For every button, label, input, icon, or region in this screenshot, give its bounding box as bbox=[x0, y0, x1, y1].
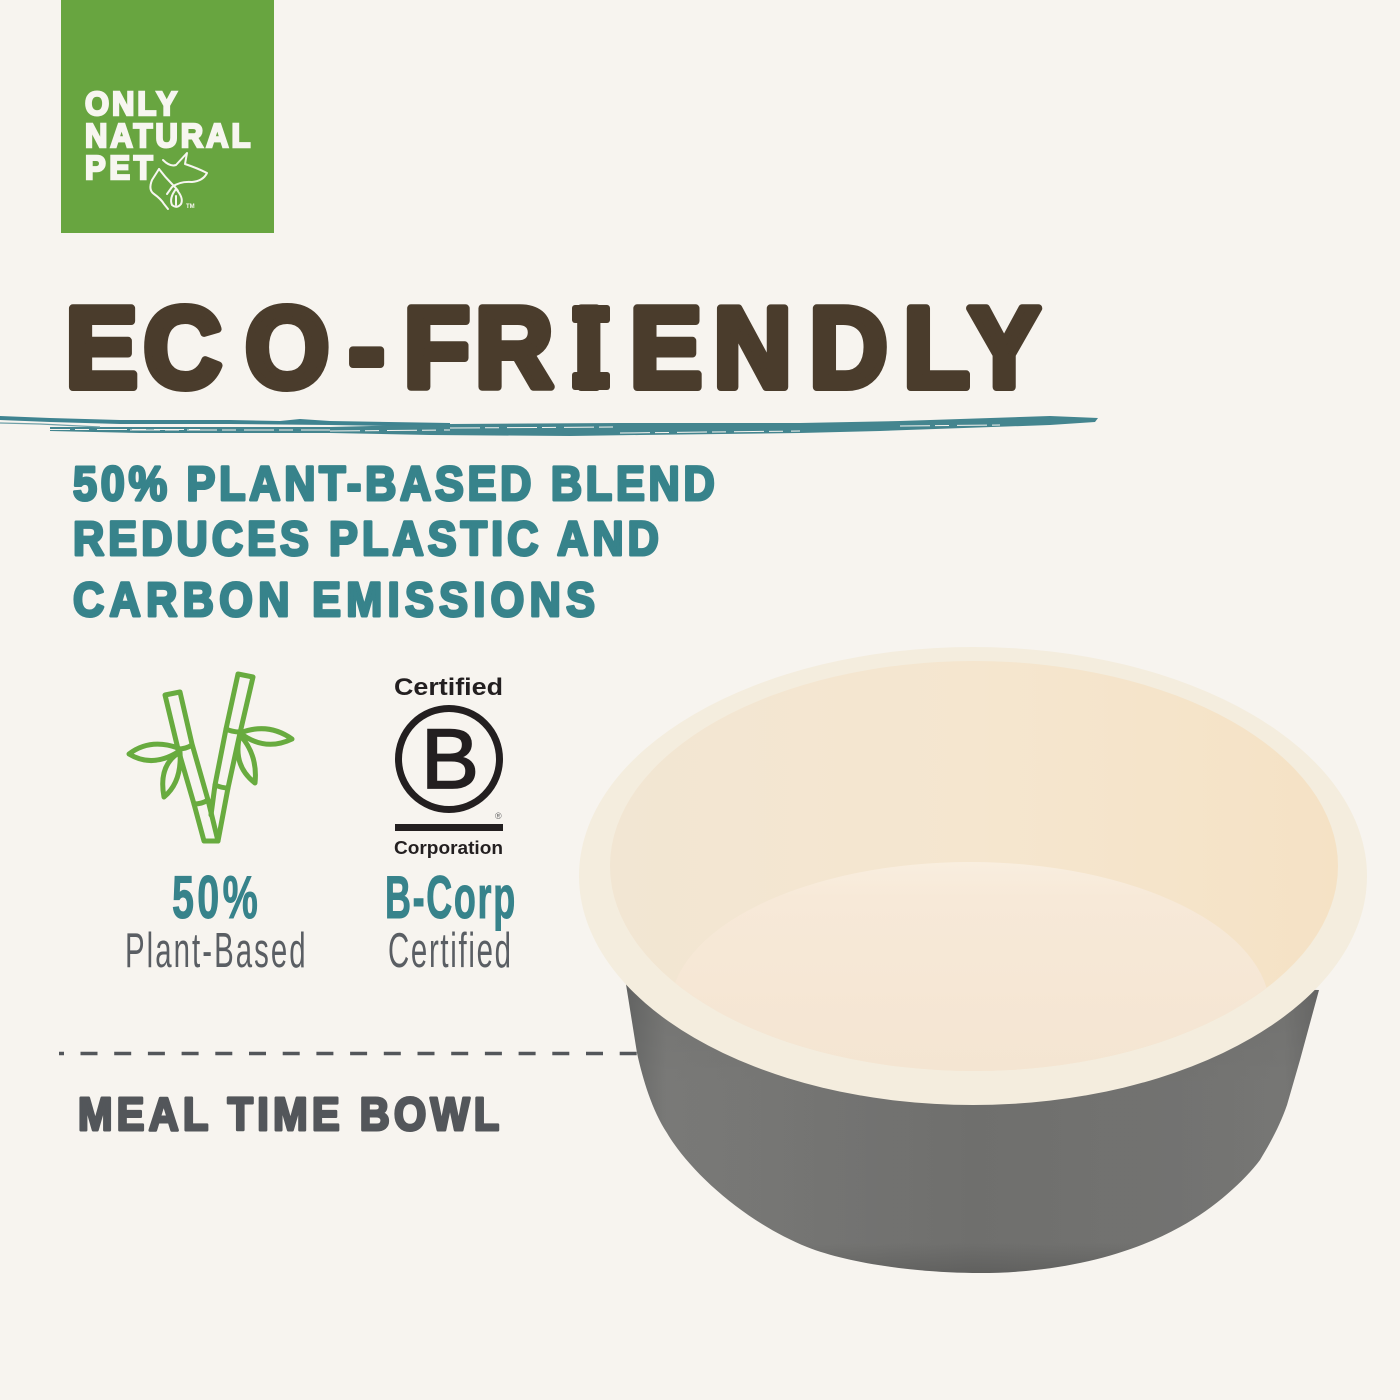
subheading: CARBON EMISSIONS bbox=[73, 573, 595, 627]
bowl grey body bbox=[625, 978, 1319, 1273]
logo wordmark: PET bbox=[85, 149, 153, 186]
bowl floor bbox=[792, 862, 1266, 1050]
bowl interior bbox=[610, 661, 1338, 1071]
subheading bbox=[73, 457, 715, 627]
icon: certified B corporation badge: Certified bbox=[394, 674, 503, 701]
stat: B-Corp certified: Certified bbox=[388, 922, 511, 978]
subheading: REDUCES PLASTIC AND bbox=[73, 512, 659, 566]
dashed divider bbox=[59, 1052, 640, 1055]
product photo: bowl bbox=[579, 647, 1367, 1273]
bowl rim bbox=[579, 647, 1367, 1105]
stat: 50% plant-based: 50% bbox=[172, 864, 258, 931]
brush stroke underline bbox=[0, 416, 1098, 436]
logo trademark: TM bbox=[186, 204, 195, 210]
logo green square bbox=[61, 0, 274, 233]
logo wordmark bbox=[85, 85, 250, 186]
logo dog, cat and leaf outline bbox=[150, 153, 207, 209]
logo wordmark: ONLY bbox=[85, 85, 177, 122]
icon: certified B corporation badge bbox=[394, 674, 503, 858]
stat: B-Corp certified bbox=[385, 865, 515, 978]
subheading: 50% PLANT-BASED BLEND bbox=[73, 457, 715, 511]
stat: 50% plant-based bbox=[125, 864, 306, 978]
logo wordmark: NATURAL bbox=[85, 117, 250, 154]
icon: certified B corporation badge: Corporation bbox=[394, 838, 503, 858]
icon: certified B corporation badge: B bbox=[421, 712, 479, 806]
stat: 50% plant-based: Plant-Based bbox=[125, 922, 306, 978]
icon: bamboo bbox=[129, 674, 292, 841]
icon: certified B corporation badge: ® bbox=[495, 811, 502, 821]
product label: MEAL TIME BOWL bbox=[78, 1089, 499, 1141]
title: ECO-FRIENDLY bbox=[66, 283, 1040, 412]
logo: Only Natural Pet bbox=[61, 0, 274, 233]
stat: B-Corp certified: B-Corp bbox=[385, 865, 515, 931]
